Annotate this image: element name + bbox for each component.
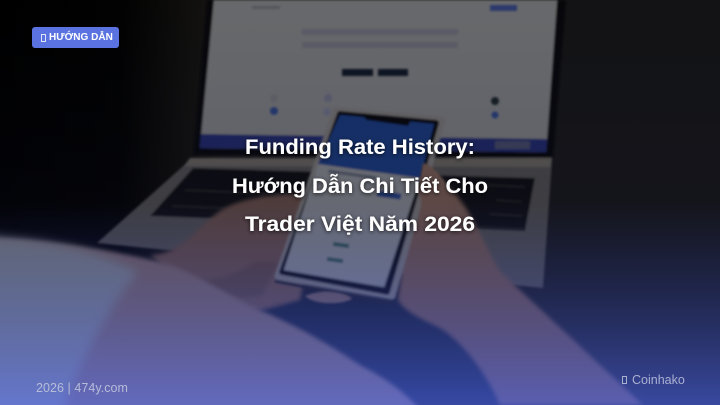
category badge (32, 27, 119, 48)
footer: source: Coinhako (632, 373, 685, 387)
keyboard (150, 168, 535, 231)
left hand (150, 193, 320, 312)
icon: missing glyph box (41, 34, 46, 42)
right hand and arm (398, 170, 643, 405)
title: Hướng Dẫn Chi Tiết Cho (232, 173, 488, 198)
title: Funding Rate History: (245, 135, 475, 159)
fingertip over phone (418, 163, 450, 215)
laptop deck (97, 160, 552, 288)
foreground body and sleeve (0, 238, 420, 405)
phone (275, 111, 442, 303)
category badge: HƯỚNG DẪN (49, 32, 113, 43)
screen (200, 0, 557, 152)
title: Trader Việt Năm 2026 (245, 212, 475, 236)
footer: year and site: 2026 | 474y.com (36, 381, 128, 395)
dark gap between arms (240, 290, 540, 405)
screen content (252, 5, 517, 118)
laptop lid (193, 0, 566, 158)
